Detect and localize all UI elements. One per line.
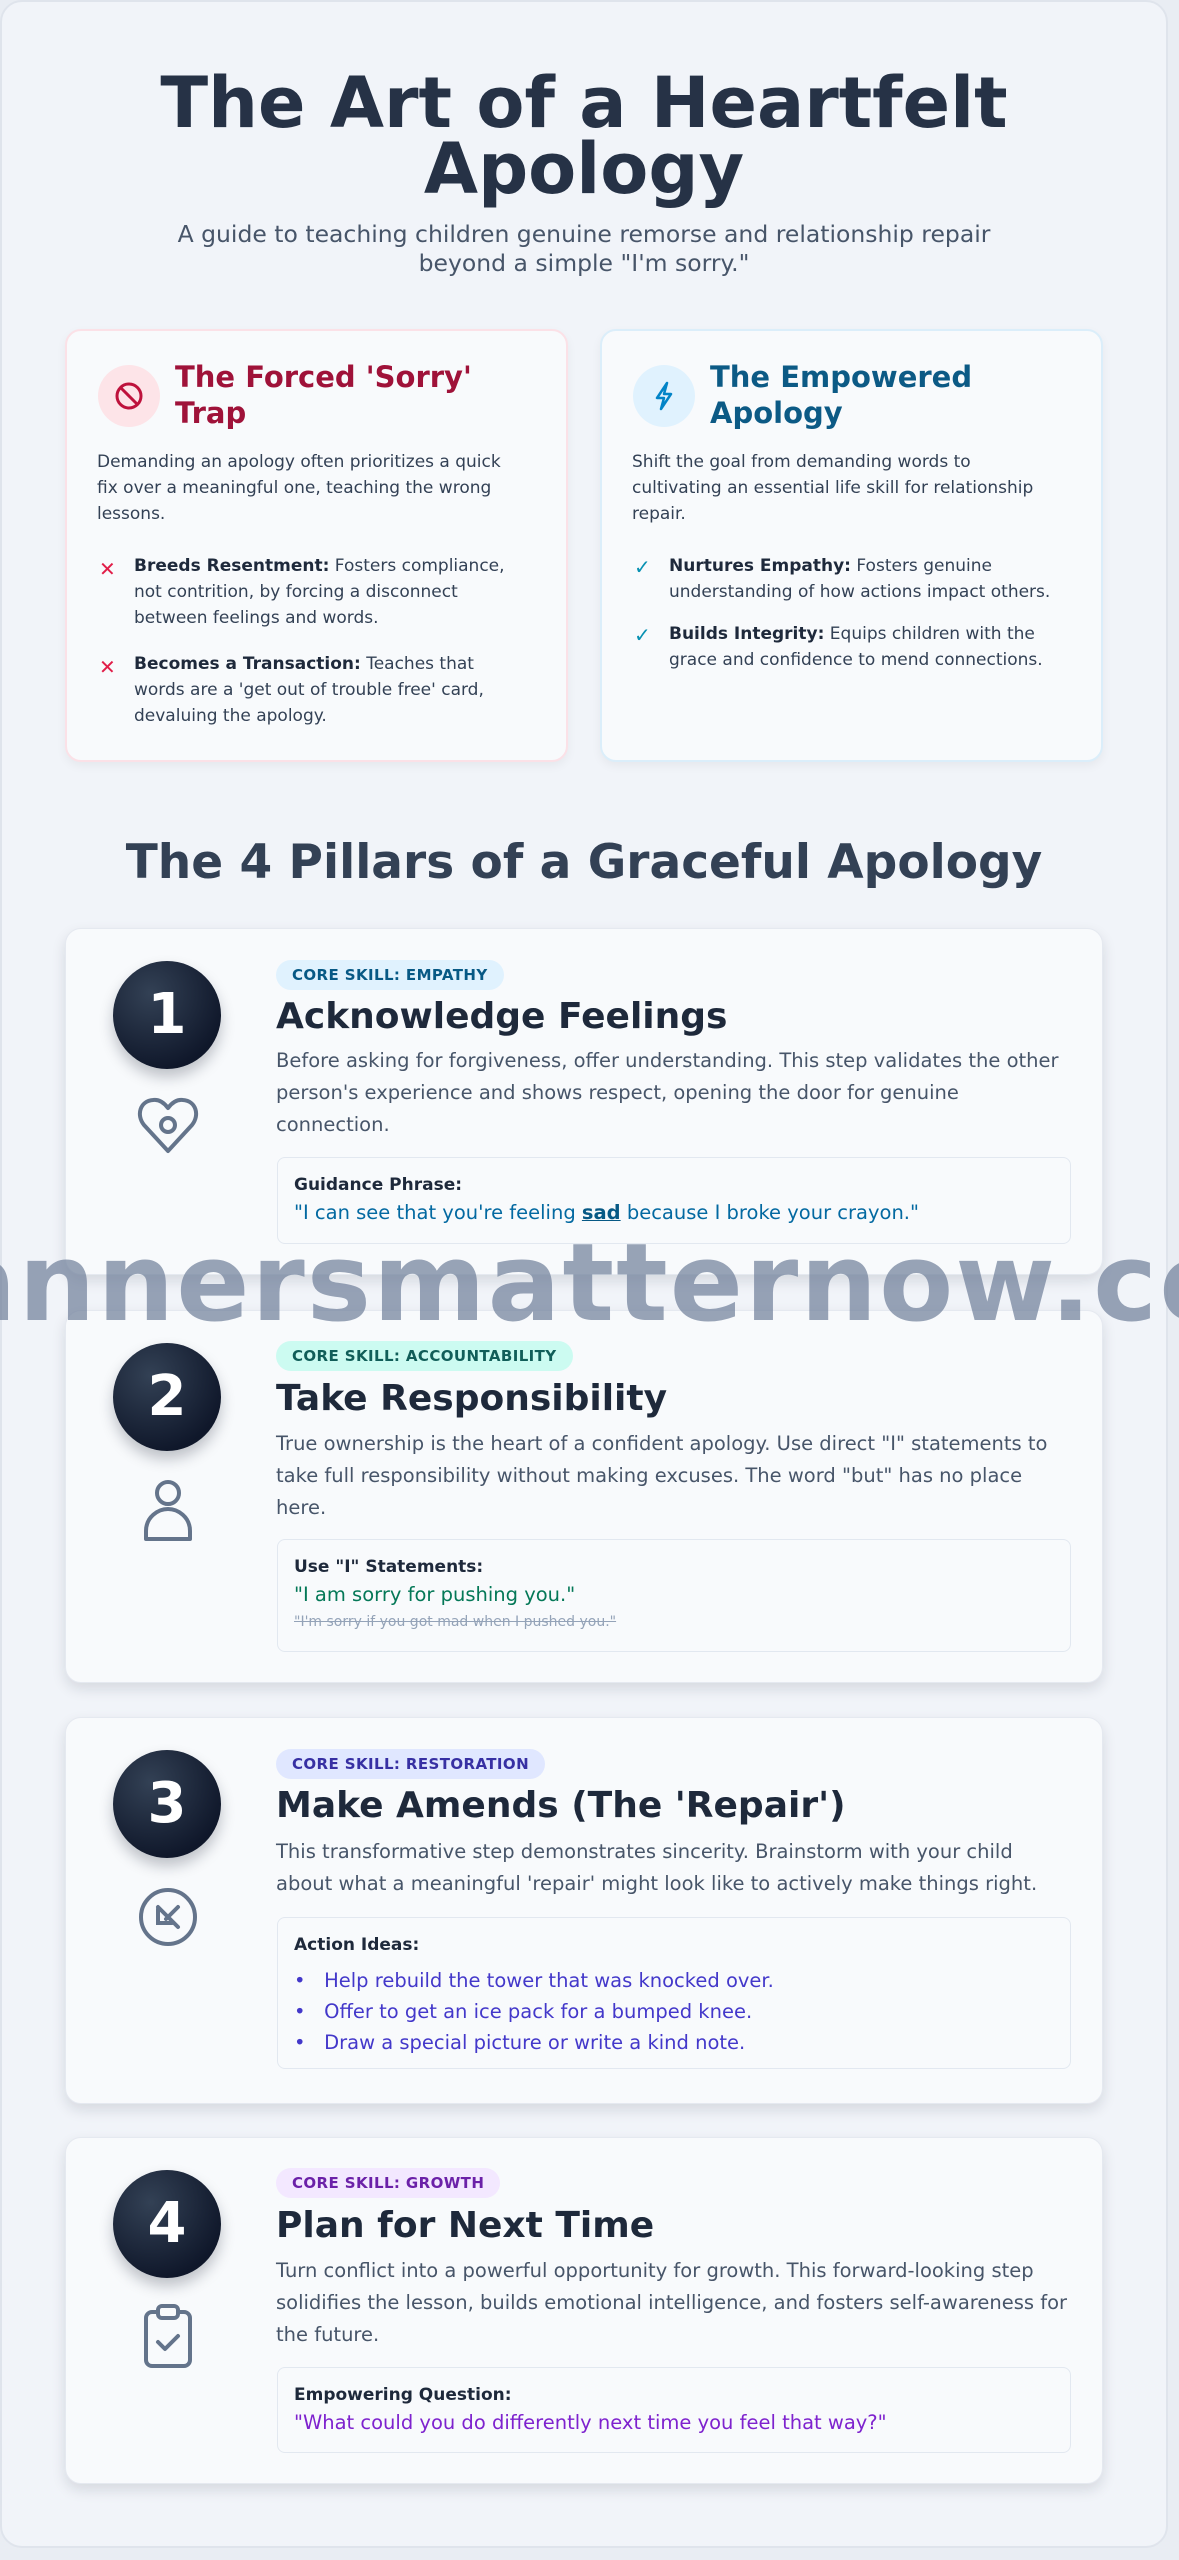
list: empowered bullets: understanding of how actions impact others. (669, 582, 1050, 602)
list: forced bullets (99, 556, 505, 726)
heading: take responsibility: Take Responsibility (276, 1378, 667, 1419)
text: acknowledge body: connection. (276, 1113, 390, 1136)
callout: I statements: "I am sorry for pushing you." (294, 1583, 575, 1606)
badge: accountability (276, 1341, 573, 1371)
text: acknowledge body (276, 1049, 1059, 1136)
list: forced bullets: ✕ (99, 655, 116, 679)
text: empowered description: cultivating an essential life skill for relationship (632, 478, 1033, 498)
subtitle (178, 220, 990, 277)
list: forced bullets: not contrition, by forcing a disconnect (134, 582, 458, 602)
callout: I statements (277, 1539, 1071, 1652)
panel: forced sorry trap (65, 329, 568, 762)
title: The Art of a Heartfelt (160, 62, 1008, 144)
heading: forced sorry (175, 360, 472, 430)
number 2 (113, 1343, 221, 1451)
callout: I statements: "I'm sorry if you got mad when I pushed you." (294, 1614, 616, 1630)
panel: pillar 2 (65, 1310, 1103, 1683)
heading: plan: Plan for Next Time (276, 2205, 654, 2246)
badge: growth: CORE SKILL: GROWTH (292, 2174, 484, 2192)
subtitle: beyond a simple "I'm sorry." (419, 249, 749, 277)
text: plan body (276, 2259, 1067, 2346)
list: forced bullets: between feelings and words. (134, 608, 379, 628)
badge: growth (276, 2168, 500, 2198)
callout: empowering question: "What could you do differently next time you feel that way?" (294, 2411, 887, 2434)
icon: prohibited (98, 365, 160, 427)
list: forced bullets: Becomes a Transaction: Teaches that (134, 654, 474, 674)
callout: action ideas (277, 1917, 1071, 2069)
callout: guidance phrase: Guidance Phrase: (294, 1175, 462, 1195)
text: empowered description: repair. (632, 504, 686, 524)
icon: clipboard (144, 2304, 192, 2368)
callout: empowering question (277, 2367, 1071, 2453)
text: empowered description (632, 452, 1033, 524)
badge: empathy (276, 960, 504, 990)
callout: action ideas: Action Ideas: (294, 1935, 419, 1955)
icon: lightning (633, 365, 695, 427)
icon: person (144, 1480, 192, 1541)
number 3 (113, 1750, 221, 1858)
heading: empowered (710, 360, 972, 430)
badge: empathy: CORE SKILL: EMPATHY (292, 966, 488, 984)
list: forced bullets: devaluing the apology. (134, 706, 327, 726)
callout: action ideas: • Draw a special picture or write a kind note. (294, 2031, 745, 2054)
title: Apology (424, 128, 744, 210)
text: acknowledge body: person's experience and shows respect, opening the door for genuine (276, 1081, 959, 1104)
heading: empowered: Apology (710, 396, 843, 430)
list: empowered bullets: ✓ (634, 623, 651, 647)
text: plan body: the future. (276, 2323, 379, 2346)
panel: pillar 4 (65, 2137, 1103, 2484)
number 1 (113, 961, 221, 1069)
subtitle: A guide to teaching children genuine remorse and relationship repair (178, 220, 990, 248)
list: empowered bullets: Builds Integrity: Equips children with the (669, 624, 1035, 644)
text: responsibility body: here. (276, 1496, 326, 1519)
number 4 (113, 2170, 221, 2278)
text: amends body (276, 1840, 1037, 1895)
number 1: 1 (148, 982, 186, 1047)
heading: forced sorry: Trap (175, 396, 246, 430)
callout: action ideas: • Help rebuild the tower that was knocked over. (294, 1969, 774, 1992)
title (160, 62, 1008, 210)
text: empowered description: Shift the goal from demanding words to (632, 452, 971, 472)
callout: I statements: Use "I" Statements: (294, 1557, 483, 1577)
number 2: 2 (148, 1364, 186, 1429)
text: amends body: about what a meaningful 'repair' might look like to actively make things right. (276, 1872, 1037, 1895)
icon: heart (138, 1098, 198, 1154)
heading: empowered: The Empowered (710, 360, 972, 394)
number 4: 4 (148, 2191, 186, 2256)
text: forced description (97, 452, 501, 524)
list: forced bullets: ✕ (99, 557, 116, 581)
callout: action ideas: • Offer to get an ice pack for a bumped knee. (294, 2000, 752, 2023)
list: empowered bullets: ✓ (634, 555, 651, 579)
heading: make amends: Make Amends (The 'Repair') (276, 1785, 846, 1826)
text: forced description: lessons. (97, 504, 165, 524)
heading: acknowledge: Acknowledge Feelings (276, 996, 727, 1037)
panel: pillar 3 (65, 1717, 1103, 2104)
text: amends body: This transformative step demonstrates sincerity. Brainstorm with your child (276, 1840, 1013, 1863)
icon: repair (139, 1888, 197, 1946)
list: forced bullets: words are a 'get out of trouble free' card, (134, 680, 484, 700)
list: forced bullets: Breeds Resentment: Fosters compliance, (134, 556, 505, 576)
text: forced description: Demanding an apology often prioritizes a quick (97, 452, 501, 472)
list: empowered bullets: grace and confidence to mend connections. (669, 650, 1043, 670)
heading: forced sorry: The Forced 'Sorry' (175, 360, 472, 394)
list: empowered bullets: Nurtures Empathy: Fosters genuine (669, 556, 992, 576)
text: responsibility body: take full responsibility without making excuses. The word "but" has no place (276, 1464, 1022, 1487)
badge: restoration: CORE SKILL: RESTORATION (292, 1755, 529, 1773)
panel: empowered apology (600, 329, 1103, 762)
callout: empowering question: Empowering Question: (294, 2385, 512, 2405)
callout: guidance phrase (277, 1157, 1071, 1244)
text: plan body: Turn conflict into a powerful opportunity for growth. This forward-looking step (276, 2259, 1034, 2282)
section heading: The 4 Pillars of a Graceful Apology (126, 835, 1042, 890)
text: responsibility body: True ownership is the heart of a confident apology. Use direct "I" statements to (276, 1432, 1047, 1455)
text: acknowledge body: Before asking for forgiveness, offer understanding. This step validates the other (276, 1049, 1059, 1072)
text: responsibility body (276, 1432, 1047, 1519)
badge: restoration (276, 1749, 545, 1779)
badge: accountability: CORE SKILL: ACCOUNTABILITY (292, 1347, 557, 1365)
number 3: 3 (148, 1771, 186, 1836)
text: forced description: fix over a meaningful one, teaching the wrong (97, 478, 491, 498)
callout: guidance phrase: "I can see that you're feeling sad because I broke your crayon." (294, 1201, 919, 1224)
list: empowered bullets (634, 555, 1050, 670)
panel: pillar 1 (65, 928, 1103, 1275)
text: plan body: solidifies the lesson, builds emotional intelligence, and fosters self-awareness for (276, 2291, 1067, 2314)
